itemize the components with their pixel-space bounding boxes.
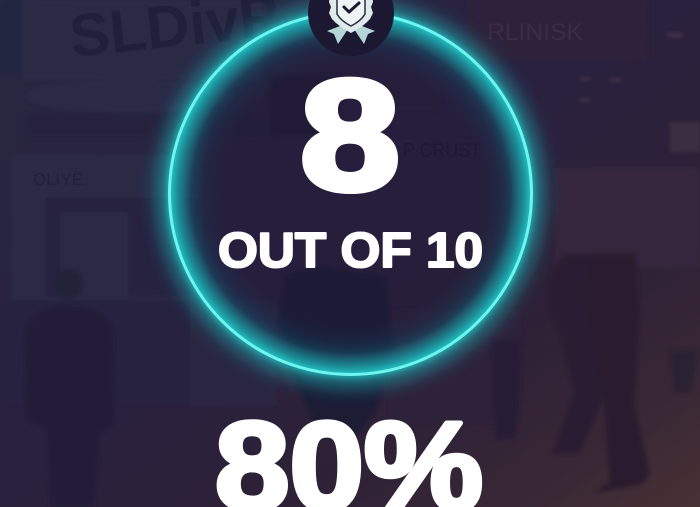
- icon: ribbon tails: [327, 26, 375, 44]
- background signage text: P CRUST: [403, 140, 481, 162]
- icon: award badge: [308, 0, 394, 56]
- background signage text: OLIYE: [33, 170, 83, 189]
- neon ring: [170, 12, 532, 374]
- label: out of 10: OUT OF 10: [218, 224, 483, 278]
- icon: check mark: [344, 3, 359, 12]
- background signage text: [33, 0, 583, 189]
- big number 8: 8: [300, 49, 400, 223]
- background crowd silhouettes: [25, 254, 697, 507]
- background signage text: RLINISK: [487, 19, 583, 46]
- icon: shield: [329, 0, 373, 33]
